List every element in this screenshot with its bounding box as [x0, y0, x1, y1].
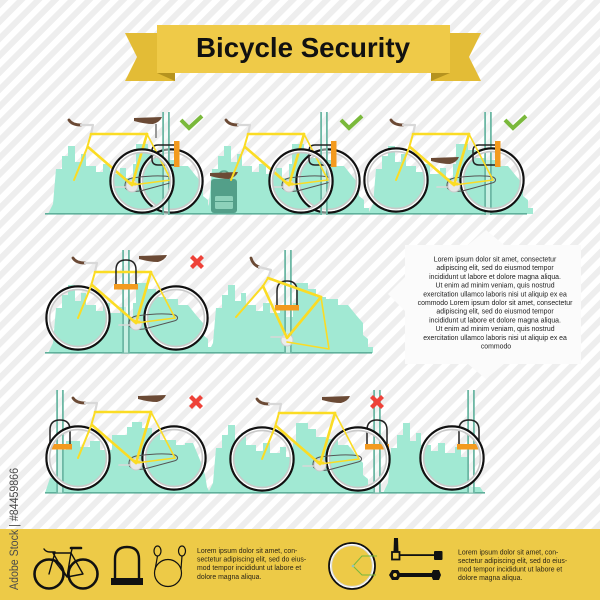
- paragraph text: commodo Lorem ipsum dolor sit amet, consectetur: [418, 300, 573, 307]
- paragraph text: Lorem ipsum dolor sit amet, consectetur: [434, 256, 557, 264]
- right footer text: mod tempor incididunt ut labore et: [458, 566, 562, 574]
- icon: cable lock: [154, 546, 186, 586]
- cross mark 3: [372, 396, 382, 408]
- right footer text: sectetur adipiscing elit, sed do eius-: [458, 558, 567, 565]
- row 2 bike 1: locked through frame only: [46, 250, 208, 353]
- left footer text: dolore magna aliqua.: [197, 574, 261, 581]
- row 2 skyline: [45, 283, 373, 354]
- paragraph text: Ut enim ad minim veniam, quis nostrud: [435, 283, 555, 290]
- row 3 lone wheel locked: [420, 390, 484, 493]
- right footer text: dolore magna aliqua.: [458, 575, 522, 582]
- icon: backpack with saddle: [210, 171, 238, 213]
- check mark 3: [505, 116, 526, 128]
- row 2 bike 2: frame only, wheels stolen: [236, 250, 329, 353]
- paragraph text: exercitation ullamco laboris nisi ut aliquip ex ea: [423, 335, 567, 342]
- left footer text: mod tempor incididunt ut labore et: [197, 565, 301, 572]
- icon: quick release lever: [392, 538, 442, 560]
- paragraph text: adipiscing elit, sed do eiusmod tempor: [436, 265, 554, 272]
- row 1 bike 1: both wheels locked: [69, 112, 202, 215]
- row 1 bike 2: both wheels locked: [226, 112, 360, 215]
- paragraph text: Ut enim ad minim veniam, quis nostrud: [435, 326, 555, 333]
- paragraph text: exercitation ullamco laboris nisi ut aliquip ex ea: [423, 291, 567, 298]
- right footer text: Lorem ipsum dolor sit amet, con-: [458, 550, 558, 556]
- row 3 skyline: [45, 422, 485, 494]
- icon: bolt-on skewer: [389, 570, 441, 580]
- icon: bicycle: [34, 548, 98, 588]
- cross mark 1: [192, 256, 202, 268]
- left footer text: sectetur adipiscing elit, sed do eius-: [197, 556, 306, 564]
- row 1 skyline: [45, 144, 533, 215]
- paragraph text: adipiscing elit, sed do eiusmod tempor: [436, 309, 554, 316]
- paragraph text: commodo: [481, 344, 511, 350]
- title ribbon: [125, 25, 481, 81]
- icon: D lock: [111, 547, 143, 585]
- paragraph text: incididunt ut labore et dolore magna aliqua.: [429, 317, 561, 324]
- row 3 bike 1: front wheel locked only: [46, 390, 206, 493]
- title: Bicycle Security: [196, 32, 410, 63]
- bottom band: [0, 529, 600, 600]
- check mark 2: [341, 116, 362, 128]
- icon: wheel with quick release callouts: [329, 543, 377, 589]
- stock id vertical text: Adobe Stock | #84459866: [9, 468, 21, 590]
- check mark 1: [181, 116, 202, 128]
- paragraph text: incididunt ut labore et dolore magna aliqua.: [429, 274, 561, 281]
- cross mark 2: [190, 396, 202, 408]
- row 3 bike 2: rear wheel locked only: [230, 390, 390, 493]
- text panel: [388, 230, 581, 379]
- left footer text: Lorem ipsum dolor sit amet, con-: [197, 548, 297, 555]
- row 1 bike 3: frame, rear wheel locked, saddle removed: [364, 112, 524, 215]
